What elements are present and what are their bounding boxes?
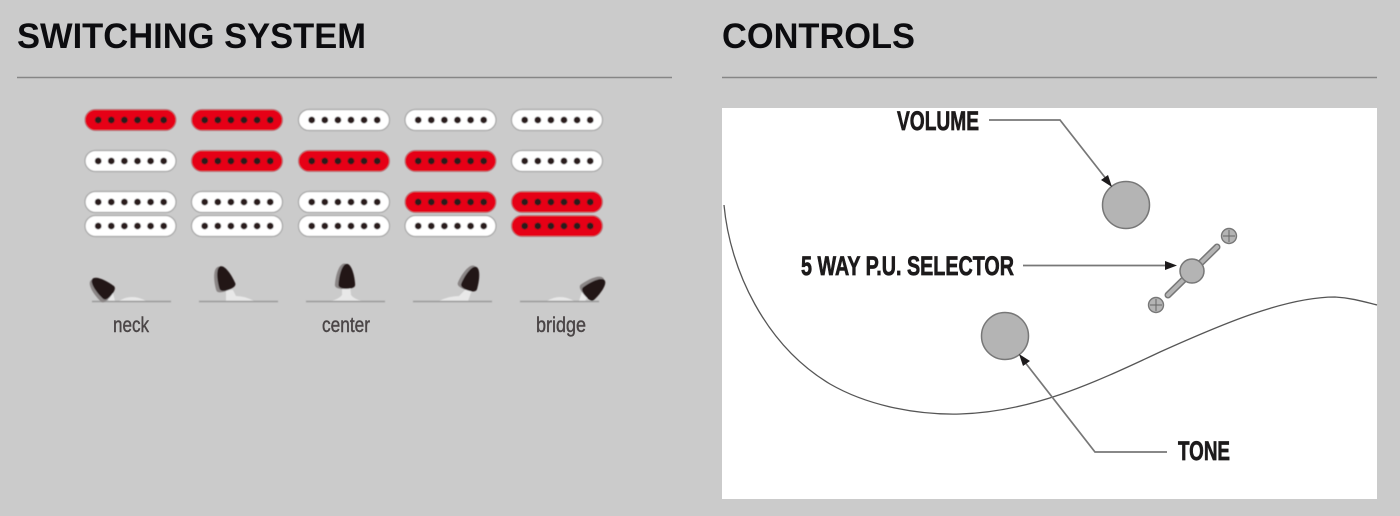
label: bridge: bridge [536, 314, 586, 337]
heading: controls: CONTROLS [722, 17, 915, 56]
5-way selector switch [1148, 228, 1236, 312]
arrow: tone [1019, 354, 1167, 452]
volume knob [1102, 182, 1150, 228]
toggle position 1: neck [85, 272, 171, 304]
controls diagram [722, 106, 1377, 499]
label: neck: neck [113, 314, 149, 337]
heading: switching system: SWITCHING SYSTEM [17, 17, 366, 56]
toggle position 2 [199, 263, 278, 302]
guitar body outline [724, 205, 1377, 414]
toggle position 3: center [306, 264, 385, 302]
pickup row 3: humbucker [85, 192, 602, 236]
pickup diagrams grid [85, 110, 602, 236]
label: tone: TONE [1178, 436, 1230, 466]
toggle position 5: bridge [520, 271, 610, 303]
arrow: volume [989, 120, 1112, 187]
label: volume: VOLUME [897, 106, 979, 136]
panel: controls [722, 17, 1377, 499]
label: center: center [322, 314, 370, 337]
pickup row 1 [85, 110, 602, 130]
panel: switching system [17, 17, 672, 337]
label: 5 way p.u. selector: 5 WAY P.U. SELECTOR [801, 251, 1014, 281]
tone knob [982, 312, 1028, 360]
pickup row 2 [85, 150, 602, 172]
toggle position 4 [413, 263, 492, 302]
arrow: selector [1023, 261, 1177, 270]
